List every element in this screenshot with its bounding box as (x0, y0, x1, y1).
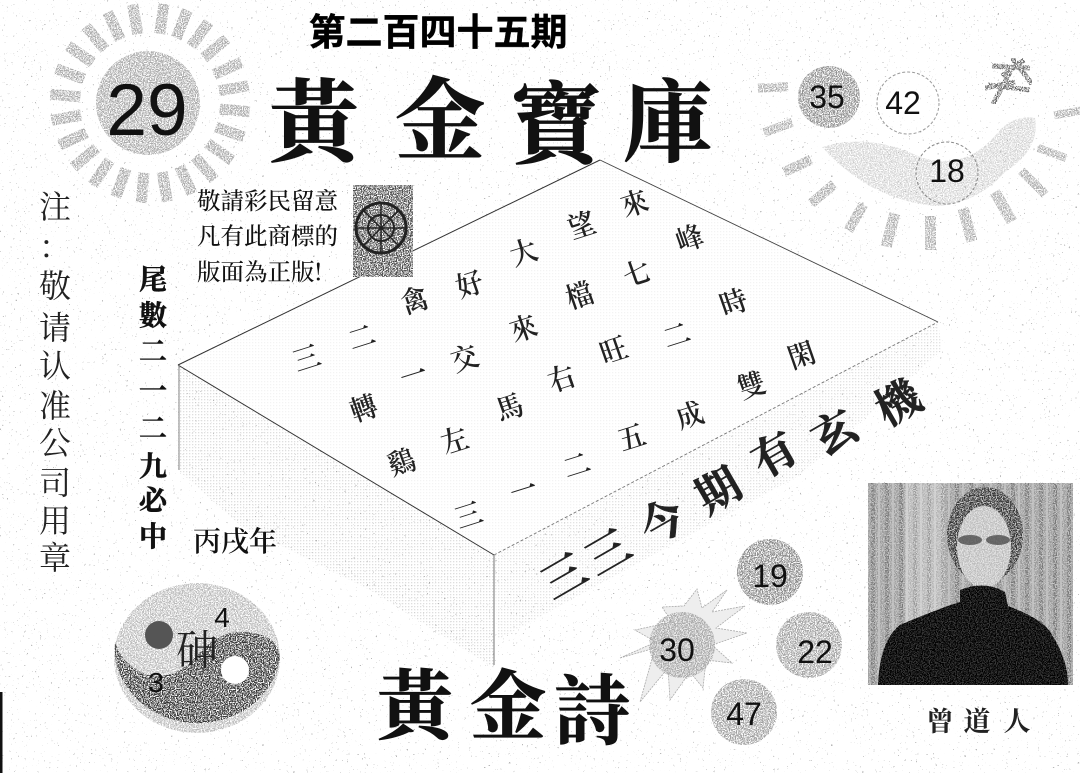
box: left face (178, 365, 494, 668)
main title: 金 (395, 48, 485, 178)
box: poem characters grid: 三 (448, 490, 488, 537)
year label: 丙戌年 (193, 520, 277, 560)
portrait photo (868, 483, 1073, 685)
main title (269, 48, 713, 182)
left vertical note: 敬 (39, 261, 71, 307)
glasses (958, 535, 1010, 545)
portrait caption: 人 (1004, 700, 1030, 739)
dark dot (145, 621, 173, 649)
right sun crescent and rays (758, 82, 1080, 250)
left vertical note: 用 (39, 496, 71, 542)
ball 42 (877, 72, 939, 134)
bottom title: 詩 (554, 651, 630, 760)
box: edge slogan: 期 (681, 449, 752, 526)
box: poem characters grid: 大 (503, 227, 543, 274)
tail number vertical text: 數 (139, 294, 167, 334)
sun with number 29 (50, 3, 250, 203)
box: poem characters grid: 七 (616, 248, 656, 295)
tail number vertical text: 二 (139, 330, 167, 370)
box: poem characters grid: 鷄 (381, 437, 421, 484)
trademark notice (197, 182, 338, 287)
box: poem characters grid: 成 (669, 390, 709, 437)
box: edge slogan (527, 360, 933, 612)
sun disc (96, 51, 200, 155)
main title: 庫 (623, 50, 713, 180)
box: edge slogan: 有 (737, 413, 808, 490)
left vertical note: 注 (39, 182, 71, 228)
box: poem characters grid: 一 (503, 465, 543, 512)
trademark stamp (353, 185, 413, 277)
left vertical note: 请 (39, 303, 71, 349)
scan edge mark (0, 692, 2, 773)
trademark notice: 凡有此商標的 (197, 217, 338, 251)
ball 19 (737, 539, 803, 605)
left vertical note: 司 (39, 458, 71, 504)
box: edge slogan: 機 (861, 360, 933, 438)
ball 35: 35 (809, 79, 845, 115)
box: poem characters grid: 轉 (343, 383, 383, 430)
ball 18 (916, 142, 978, 204)
box: poem characters grid: 馬 (489, 382, 529, 429)
box: poem characters grid: 交 (444, 333, 484, 380)
box: poem characters grid: 旺 (593, 325, 633, 372)
isometric box (178, 160, 942, 668)
ball 35 (798, 66, 860, 128)
photo background (868, 483, 1073, 685)
box: poem characters grid: 峰 (669, 213, 709, 260)
left vertical note (39, 182, 71, 579)
left vertical note: 公 (39, 418, 71, 464)
number 4: 4 (214, 602, 230, 633)
box: poem characters grid: 好 (449, 259, 489, 306)
box: poem characters grid: 禽 (394, 275, 434, 322)
box: poem characters grid: 五 (611, 412, 651, 459)
face (957, 506, 1011, 588)
left vertical note: 准 (39, 381, 71, 427)
box: poem characters grid: 二 (556, 440, 596, 487)
bottom title: 金 (470, 646, 546, 755)
sun rays (50, 3, 250, 203)
box: poem characters grid: 時 (713, 277, 753, 324)
main title: 寶 (511, 52, 603, 182)
box: poem characters grid: 望 (561, 200, 601, 247)
portrait caption: 道 (964, 700, 990, 739)
box: poem characters grid: 一 (393, 350, 433, 397)
box: edge slogan: 三 (527, 535, 598, 612)
box: poem characters grid: 來 (503, 303, 543, 350)
trademark notice: 版面為正版! (197, 253, 322, 287)
box: poem characters grid: 右 (541, 353, 581, 400)
tail number vertical text: 九 (139, 445, 167, 485)
portrait caption (926, 700, 1030, 739)
ball 47: 47 (726, 696, 762, 732)
left vertical note: 章 (39, 533, 71, 579)
yin yang dark half (115, 632, 280, 723)
icon: leaf sprig (985, 58, 1032, 104)
ball 30: 30 (659, 632, 695, 668)
box: poem characters grid: 二 (341, 312, 381, 359)
box: poem characters grid: 左 (434, 415, 474, 462)
number balls cluster (620, 539, 842, 745)
tail number vertical text (139, 258, 170, 555)
box: poem characters grid (286, 178, 821, 537)
box: edge slogan: 今 (625, 480, 696, 557)
box: poem characters grid: 三 (286, 333, 326, 380)
yin yang symbol (114, 583, 280, 733)
box: poem characters grid: 檔 (559, 270, 599, 317)
tail number vertical text: 中 (139, 515, 167, 555)
ball 30 (649, 612, 715, 678)
yin yang light disc (114, 583, 280, 733)
box: top face (178, 160, 938, 665)
trademark notice: 敬請彩民留意 (197, 182, 338, 216)
number 29: 29 (106, 70, 188, 151)
box: edge slogan: 三 (571, 511, 642, 588)
period heading: 第二百四十五期 (308, 2, 568, 56)
bottom title (377, 646, 630, 760)
box: poem characters grid: 閑 (781, 330, 821, 377)
ball 18: 18 (929, 153, 965, 189)
portrait caption: 曾 (926, 700, 954, 739)
ball 42: 42 (885, 85, 921, 121)
ball 22: 22 (797, 634, 833, 670)
ball 22 (776, 612, 842, 678)
number 3: 3 (148, 667, 164, 698)
right sun with numbers (758, 58, 1080, 250)
tail number vertical text: 一 (139, 369, 167, 409)
starburst (620, 589, 747, 702)
tail number vertical text: 必 (139, 479, 170, 519)
tail number vertical text: 尾 (139, 258, 167, 298)
light dot (221, 656, 249, 684)
box: edge slogan: 玄 (797, 389, 870, 468)
box: poem characters grid: 來 (614, 178, 654, 225)
tail number vertical text: 二 (139, 407, 167, 447)
left vertical note: 认 (39, 341, 71, 387)
box: right face (494, 322, 942, 640)
character: 砷 (176, 618, 218, 678)
hair (947, 487, 1023, 583)
main title: 黃 (269, 50, 370, 180)
torso (878, 585, 1068, 685)
ball 47 (711, 679, 777, 745)
bottom title: 黃 (377, 646, 463, 755)
ball 19: 19 (752, 558, 788, 594)
left vertical note: ： (39, 222, 71, 268)
box: poem characters grid: 雙 (731, 360, 771, 407)
box: poem characters grid: 二 (656, 310, 696, 357)
